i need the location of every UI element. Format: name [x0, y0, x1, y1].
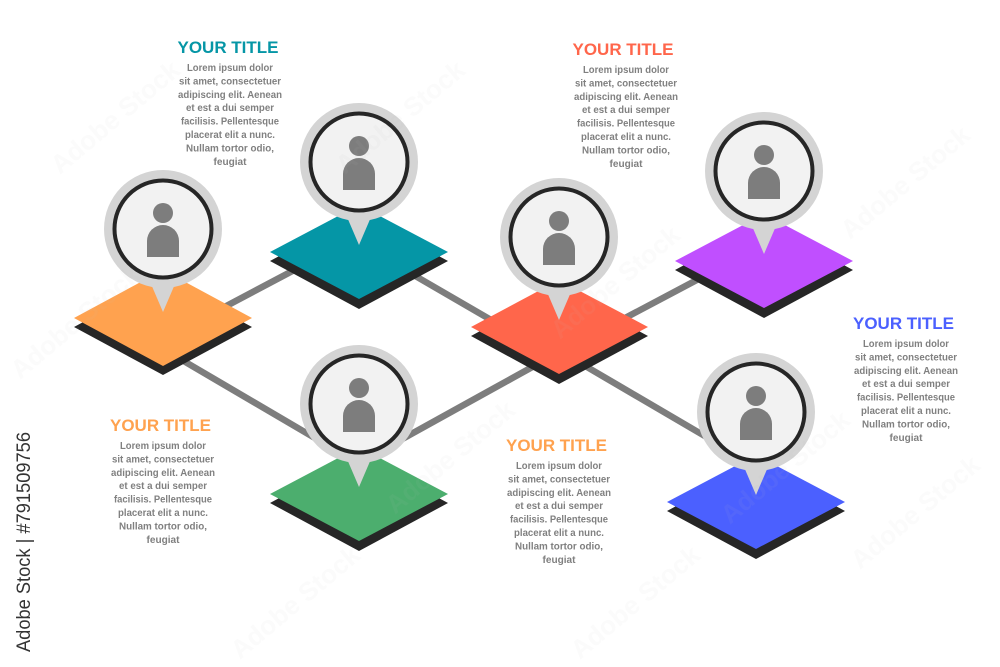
icon: person pin orange	[104, 170, 222, 312]
body: blue: Nullam tortor odio,	[862, 419, 950, 430]
body: orange	[111, 441, 215, 546]
body: red: et est a dui semper	[582, 105, 670, 116]
body: red: sit amet, consectetuer	[575, 78, 677, 89]
body: center orange	[507, 461, 611, 566]
body: center orange: sit amet, consectetuer	[508, 474, 610, 485]
body: orange: placerat elit a nunc.	[118, 508, 208, 519]
text: Adobe Stock	[835, 119, 976, 245]
body: center orange: feugiat	[542, 555, 576, 566]
connector lines	[170, 267, 715, 443]
text: Adobe Stock	[845, 449, 986, 575]
icon: person pin red	[500, 178, 618, 320]
body: teal	[178, 63, 282, 168]
heading: red title: YOUR TITLE	[572, 40, 674, 59]
body: red	[574, 65, 678, 170]
text: Adobe Stock	[225, 539, 366, 665]
body: blue: feugiat	[890, 433, 923, 444]
body: orange: facilisis. Pellentesque	[114, 495, 212, 506]
body: teal: placerat elit a nunc.	[185, 130, 275, 141]
body: red: facilisis. Pellentesque	[577, 119, 675, 130]
text: Adobe Stock	[330, 54, 471, 180]
body: orange: et est a dui semper	[119, 481, 207, 492]
body: red: Lorem ipsum dolor	[583, 65, 669, 76]
node: teal platform	[270, 205, 448, 309]
body: red: placerat elit a nunc.	[581, 132, 671, 143]
body: center orange: Lorem ipsum dolor	[516, 461, 602, 472]
body: teal: facilisis. Pellentesque	[181, 117, 279, 128]
body: center orange: placerat elit a nunc.	[514, 528, 604, 539]
body: center orange: facilisis. Pellentesque	[510, 515, 608, 526]
node: purple platform	[675, 214, 853, 318]
heading: orange title: YOUR TITLE	[110, 416, 211, 435]
body: red: adipiscing elit. Aenean	[574, 92, 678, 103]
text block: red	[572, 40, 678, 170]
body: blue: sit amet, consectetuer	[855, 352, 957, 363]
icon: person pin blue	[697, 353, 815, 495]
node: orange platform	[74, 270, 252, 375]
heading: blue title: YOUR TITLE	[853, 314, 954, 333]
body: orange: sit amet, consectetuer	[112, 454, 214, 465]
body: center orange: et est a dui semper	[515, 501, 603, 512]
body: center orange: Nullam tortor odio,	[515, 541, 603, 552]
text block: blue	[853, 314, 958, 444]
body: center orange: adipiscing elit. Aenean	[507, 488, 611, 499]
body: orange: adipiscing elit. Aenean	[111, 468, 215, 479]
text block: orange	[110, 416, 215, 546]
text block: teal	[178, 38, 282, 168]
body: orange: feugiat	[146, 535, 180, 546]
body: blue: placerat elit a nunc.	[861, 406, 951, 417]
body: teal: adipiscing elit. Aenean	[178, 90, 282, 101]
node: blue platform	[667, 455, 845, 559]
body: blue	[854, 339, 958, 444]
heading: teal title: YOUR TITLE	[178, 38, 278, 57]
body: blue: Lorem ipsum dolor	[863, 339, 949, 350]
body: blue: adipiscing elit. Aenean	[854, 366, 958, 377]
text block: center orange	[506, 436, 611, 566]
body: blue: et est a dui semper	[862, 379, 950, 390]
heading: center orange title: YOUR TITLE	[506, 436, 607, 455]
body: orange: Lorem ipsum dolor	[120, 441, 206, 452]
body: teal: et est a dui semper	[186, 103, 274, 114]
body: red: feugiat	[610, 159, 643, 170]
body: teal: feugiat	[214, 157, 247, 168]
icon: person pin purple	[705, 112, 823, 254]
text: Adobe Stock	[5, 259, 146, 385]
text: Adobe Stock	[565, 539, 706, 665]
text: Adobe Stock	[45, 54, 186, 180]
body: teal: Lorem ipsum dolor	[187, 63, 273, 74]
text: Adobe Stock	[380, 394, 521, 520]
body: orange: Nullam tortor odio,	[119, 521, 207, 532]
body: red: Nullam tortor odio,	[582, 145, 670, 156]
body: teal: sit amet, consectetuer	[179, 76, 281, 87]
side credit text: Adobe Stock | #791509756	[14, 432, 35, 652]
icon: person pin green	[300, 345, 418, 487]
icon: person pin teal	[300, 103, 418, 245]
text: Adobe Stock	[715, 404, 856, 530]
body: teal: Nullam tortor odio,	[186, 143, 274, 154]
body: blue: facilisis. Pellentesque	[857, 393, 955, 404]
text: Adobe Stock	[545, 219, 686, 345]
node: green platform	[270, 447, 448, 551]
node: red platform	[471, 280, 648, 384]
